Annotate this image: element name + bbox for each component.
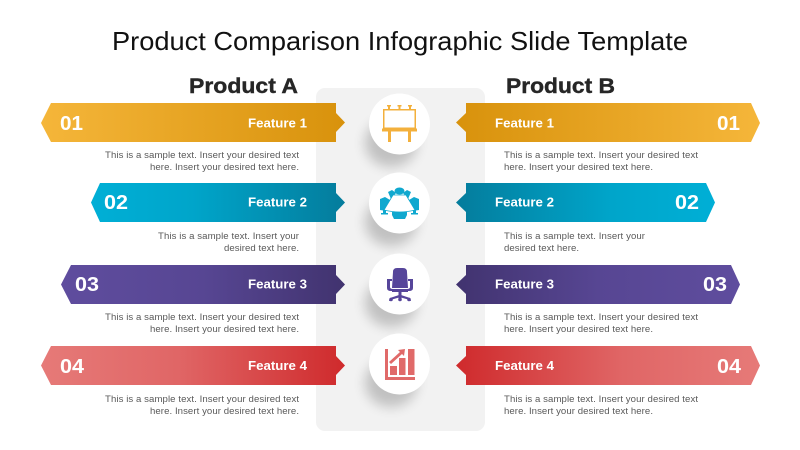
- left row 1: Feature 1: This is a sample text. Insert your desired text: [105, 150, 299, 161]
- icon: billboard: [365, 94, 430, 167]
- left row 2: Feature 2: [91, 183, 345, 254]
- icon: office chair: [365, 254, 430, 327]
- right row 4: Feature 4: Feature 4: [495, 359, 554, 373]
- right row 2: Feature 2: Feature 2: [495, 196, 554, 210]
- right row 2: Feature 2: 02: [675, 192, 699, 214]
- left row 2: Feature 2: desired text here.: [224, 243, 299, 254]
- panel: center column: [316, 88, 485, 431]
- right row 3: Feature 3: [456, 265, 740, 335]
- left row 1: Feature 1: 01: [60, 113, 83, 135]
- right row 4: Feature 4: 04: [717, 356, 742, 378]
- right row 4: Feature 4: here. Insert your desired text here.: [504, 406, 653, 417]
- right row 1: Feature 1: [456, 103, 760, 173]
- right row 1: Feature 1: here. Insert your desired text here.: [504, 162, 653, 173]
- left row 1: Feature 1: [41, 103, 345, 173]
- left row 4: Feature 4: [41, 346, 345, 417]
- right row 2: Feature 2: desired text here.: [504, 243, 579, 254]
- left row 1: Feature 1: Feature 1: [248, 116, 307, 130]
- left row 3: Feature 3: here. Insert your desired text here.: [150, 324, 299, 335]
- right row 2: Feature 2: This is a sample text. Insert your: [504, 231, 646, 242]
- left row 2: Feature 2: This is a sample text. Insert your: [158, 231, 300, 242]
- left row 4: Feature 4: 04: [60, 356, 85, 378]
- right row 3: Feature 3: Feature 3: [495, 278, 554, 292]
- right row 1: Feature 1: Feature 1: [495, 116, 554, 130]
- left row 3: Feature 3: 03: [75, 274, 99, 296]
- right row 4: Feature 4: This is a sample text. Insert your desired text: [504, 394, 698, 405]
- title: Product Comparison Infographic Slide Template: [112, 26, 688, 56]
- icon: growth chart: [365, 334, 430, 407]
- left row 2: Feature 2: 02: [104, 192, 128, 214]
- left row 4: Feature 4: Feature 4: [248, 359, 307, 373]
- right row 3: Feature 3: here. Insert your desired text here.: [504, 324, 653, 335]
- right row 1: Feature 1: This is a sample text. Insert your desired text: [504, 150, 698, 161]
- left row 3: Feature 3: This is a sample text. Insert your desired text: [105, 312, 299, 323]
- heading: Product B: Product B: [506, 75, 615, 98]
- right row 3: Feature 3: This is a sample text. Insert your desired text: [504, 312, 698, 323]
- left row 3: Feature 3: Feature 3: [248, 278, 307, 292]
- left row 3: Feature 3: [61, 265, 345, 335]
- right row 2: Feature 2: [456, 183, 715, 254]
- right row 3: Feature 3: 03: [703, 274, 727, 296]
- left row 2: Feature 2: Feature 2: [248, 196, 307, 210]
- right row 4: Feature 4: [456, 346, 760, 417]
- right row 1: Feature 1: 01: [717, 113, 740, 135]
- left row 1: Feature 1: here. Insert your desired text here.: [150, 162, 299, 173]
- left row 4: Feature 4: here. Insert your desired text here.: [150, 406, 299, 417]
- left row 4: Feature 4: This is a sample text. Insert your desired text: [105, 394, 299, 405]
- heading: Product A: Product A: [189, 75, 298, 98]
- icon: conference table: [365, 172, 430, 246]
